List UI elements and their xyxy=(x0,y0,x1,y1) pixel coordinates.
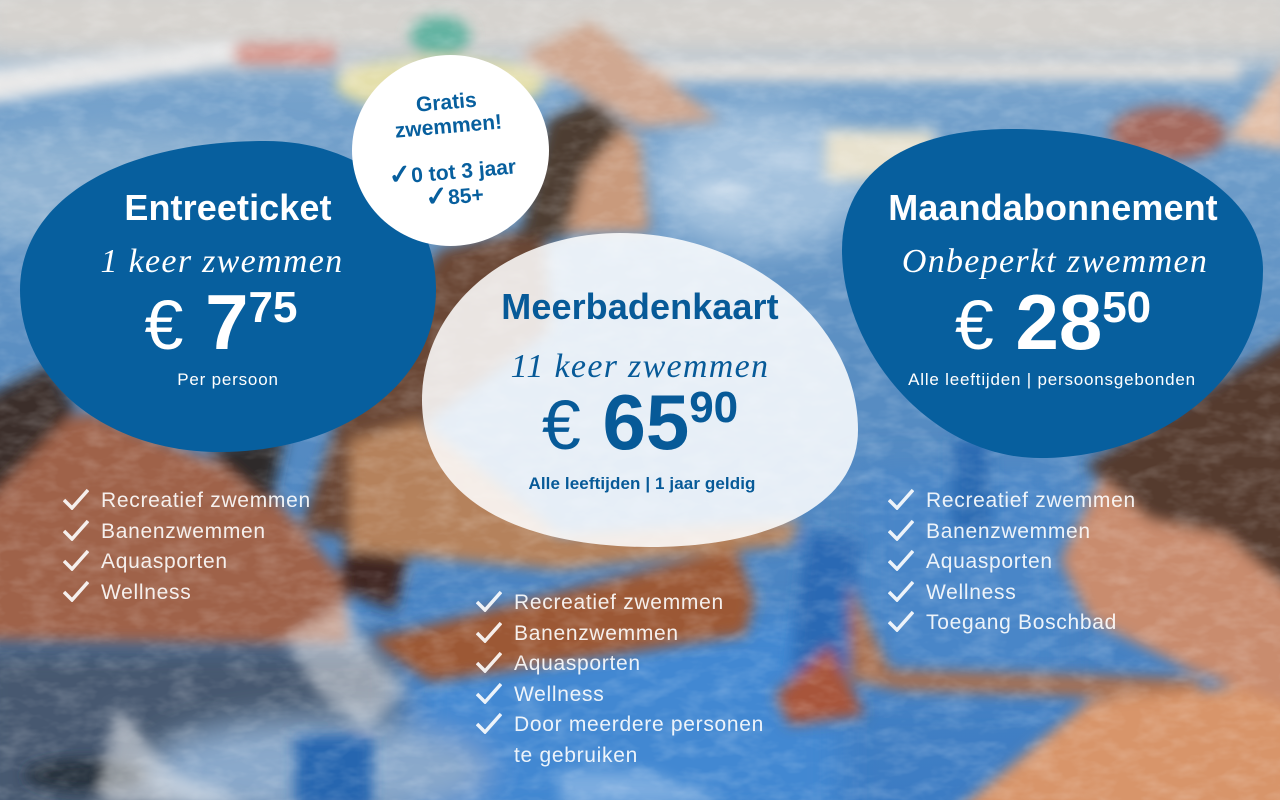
price: € 775 xyxy=(145,278,297,366)
list: Maandabonnement features: Banenzwemmen xyxy=(926,520,1091,542)
badge text xyxy=(387,89,517,212)
blob: white background xyxy=(422,233,858,547)
heading: Entreeticket xyxy=(124,187,332,228)
blob: blue background xyxy=(20,141,436,452)
heading: Maandabonnement xyxy=(888,187,1218,228)
list: Entreeticket features xyxy=(63,488,311,604)
list: Maandabonnement features xyxy=(888,488,1136,634)
subtitle: 11 keer zwemmen xyxy=(511,348,769,385)
subtitle: Onbeperkt zwemmen xyxy=(902,243,1208,280)
panel: Maandabonnement xyxy=(842,129,1263,458)
list: Maandabonnement features: Toegang Boschbad xyxy=(926,611,1117,634)
list: Entreeticket features: Aquasporten xyxy=(101,550,228,573)
price: € 2850 xyxy=(955,278,1151,366)
list: Meerbadenkaart features: Aquasporten xyxy=(514,652,641,675)
badge: Gratis zwemmen xyxy=(352,55,549,246)
badge text: zwemmen! ✓0 tot 3 jaar xyxy=(387,110,517,190)
list: Meerbadenkaart features: te gebruiken xyxy=(514,744,638,766)
badge text: ✓85+ xyxy=(424,180,485,212)
list: Meerbadenkaart features: Recreatief zwemmen xyxy=(514,591,724,614)
list: Entreeticket features: Recreatief zwemmen xyxy=(101,489,311,512)
note: Per persoon xyxy=(177,370,279,389)
note: Alle leeftijden | 1 jaar geldig xyxy=(528,474,756,493)
heading: Meerbadenkaart xyxy=(501,286,779,327)
list: Entreeticket features: Banenzwemmen xyxy=(101,520,266,542)
price: € 6590 xyxy=(542,378,738,466)
list: Maandabonnement features: Recreatief zwemmen xyxy=(926,489,1136,512)
panel: Entreeticket xyxy=(20,141,436,452)
note: Alle leeftijden | persoonsgebonden xyxy=(908,370,1196,389)
blob: blue background xyxy=(842,129,1263,458)
subtitle: 1 keer zwemmen xyxy=(101,243,343,280)
panel: Meerbadenkaart xyxy=(422,233,858,547)
list: Maandabonnement features: Wellness xyxy=(926,580,1016,604)
list: Entreeticket features: Wellness xyxy=(101,580,191,604)
list: Meerbadenkaart features: Door meerdere personen xyxy=(514,713,764,736)
list: Meerbadenkaart features: Wellness xyxy=(514,682,604,706)
list: Meerbadenkaart features xyxy=(476,590,764,766)
list: Maandabonnement features: Aquasporten xyxy=(926,550,1053,573)
badge text: Gratis xyxy=(415,89,478,117)
list: Meerbadenkaart features: Banenzwemmen xyxy=(514,622,679,644)
